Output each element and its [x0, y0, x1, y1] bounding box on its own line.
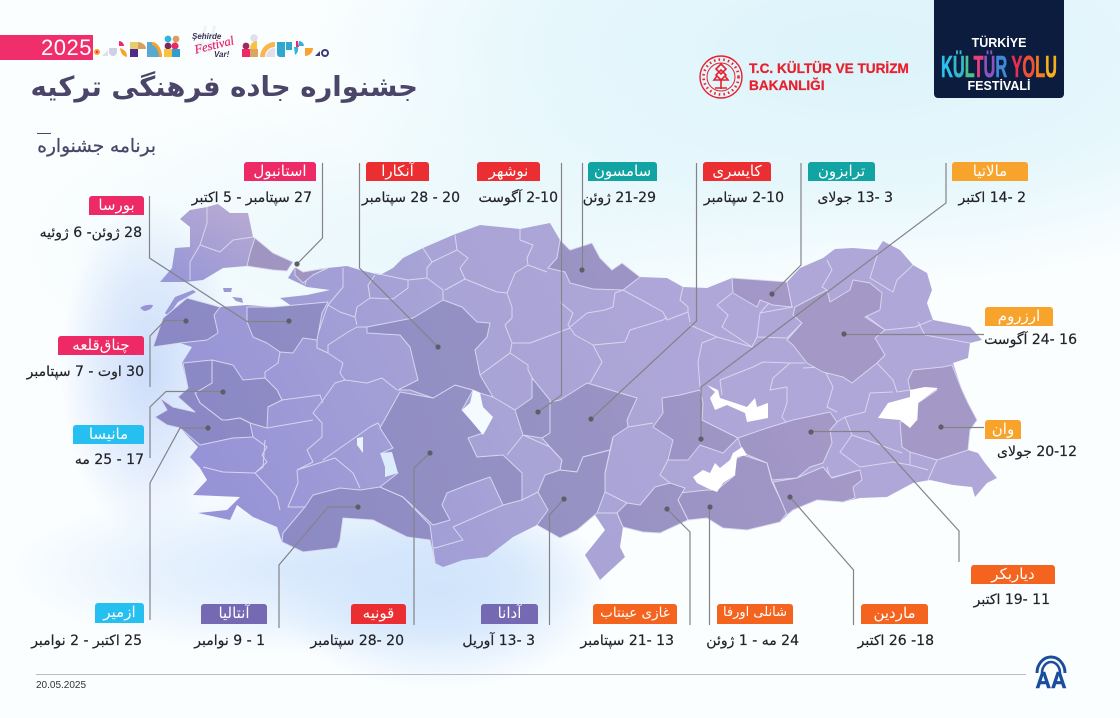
slogan: Şehirde Festival Var: # — [196, 18, 218, 62]
label: Gaziantep: غازی عینتاب — [600, 605, 670, 621]
leader: Canakkale — [150, 318, 189, 387]
label: Mardin: ماردین — [873, 604, 916, 622]
leader: Malatya — [698, 163, 946, 442]
label: Van — [985, 420, 1077, 460]
label: Istanbul: استانبول — [253, 162, 307, 180]
label: Erzurum: 16 -24 آگوست — [984, 332, 1077, 348]
label: Bursa: 28 ژوئن- 6 ژوئیه — [40, 225, 142, 241]
province: Mardin — [773, 467, 862, 515]
label: Mardin — [856, 604, 934, 649]
lake: Keban — [707, 385, 768, 422]
Kültür Yolu multicolour wordmark: KÜLTÜR YOLU — [941, 49, 1057, 84]
label: Erzurum — [984, 307, 1077, 348]
leader: Erzurum — [841, 331, 984, 337]
label: Canakkale: 30 اوت - 7 سپتامبر — [27, 364, 144, 380]
province borders — [190, 207, 970, 548]
label: Istanbul — [191, 162, 316, 206]
label: Antalya: 1 - 9 نوامبر — [194, 633, 265, 649]
label: Adana — [462, 604, 538, 649]
label: Kayseri — [703, 162, 784, 206]
label: Istanbul: 27 سپتامبر - 5 اکتبر — [192, 190, 312, 206]
ministry emblem — [699, 55, 743, 99]
leader: Istanbul — [294, 163, 322, 267]
province: Adana — [537, 450, 610, 538]
year banner — [0, 35, 93, 60]
leader: Bursa — [150, 196, 292, 324]
leader: Samsun — [579, 163, 585, 273]
label: Mardin: 18- 26 اکتبر — [858, 633, 934, 649]
footer rule — [36, 674, 1026, 675]
slogan: Şehirde Festival Var: Şehirde — [192, 32, 221, 41]
festival logo panel — [934, 0, 1064, 98]
leader: Van — [938, 424, 984, 430]
label: Izmir — [30, 603, 144, 649]
province: Nevsehir — [515, 378, 550, 438]
leader: Gaziantep — [664, 506, 690, 625]
province: Malatya — [653, 390, 738, 460]
label: Malatya: مالاتیا — [973, 162, 1007, 180]
province: Manisa — [195, 360, 282, 428]
leader: Antalya — [279, 504, 361, 628]
leader: Mardin — [787, 494, 854, 625]
Türkiye text: TÜRKİYE — [972, 36, 1026, 50]
label: Sanliurfa: شانلی اورفا — [723, 605, 787, 620]
label: Samsun: 21-29 ژوئن — [583, 190, 656, 206]
label: Kayseri: کایسری — [712, 162, 762, 180]
province: Izmir — [155, 360, 253, 445]
leader: Konya — [414, 450, 433, 625]
label: Ankara: آنکارا — [381, 162, 414, 180]
label: Sanliurfa: 24 مه - 1 ژوئن — [706, 633, 799, 649]
Festivali text: FESTİVALİ — [968, 79, 1030, 93]
province: Konya — [380, 385, 522, 525]
label: Malatya — [952, 162, 1028, 206]
label: Bursa — [40, 196, 144, 241]
province: Van — [900, 365, 977, 460]
leader: Trabzon — [769, 163, 801, 297]
label: Konya — [310, 604, 406, 649]
Thrace — [160, 204, 293, 282]
lake: Tuz — [462, 390, 493, 435]
slogan: Şehirde Festival Var: Festival — [193, 33, 235, 57]
ministry name: BAKANLIĞI — [749, 78, 825, 93]
map of Turkey — [140, 204, 997, 580]
agency logo — [1036, 656, 1066, 690]
province: Ankara — [367, 300, 493, 398]
label: Manisa: مانیسا — [89, 425, 128, 443]
label: Erzurum: ارزروم — [998, 307, 1040, 325]
leader: Ankara — [360, 163, 441, 350]
slogan: Şehirde Festival Var: Var! — [214, 50, 229, 59]
label: Van: 20-12 جولای — [997, 444, 1077, 460]
label: Diyarbakir: 11 -19 اکتبر — [974, 592, 1050, 608]
label: Ankara — [361, 162, 460, 206]
ministry name — [749, 60, 909, 93]
leader lines and city markers — [150, 163, 984, 628]
lake: Ataturk — [693, 447, 747, 492]
label: Kayseri: 2-10 سپتامبر — [704, 190, 784, 206]
lake: Beysehir — [380, 452, 398, 477]
ministry name: T.C. KÜLTÜR VE TURİZM — [749, 61, 909, 76]
leader: Manisa — [150, 389, 226, 458]
lake: Egirdir — [357, 437, 363, 453]
label: Gaziantep: 13 -21 سپتامبر — [580, 633, 674, 649]
label: Antalya — [194, 604, 267, 649]
label: Diyarbakir — [971, 565, 1055, 608]
province: Trabzon — [732, 278, 792, 307]
label: Konya: 20 -28 سپتامبر — [310, 633, 404, 649]
province: Diyarbakir — [738, 412, 837, 480]
subtitle with rule: برنامه جشنواره — [37, 136, 156, 157]
label: Izmir: ازمیر — [103, 603, 136, 621]
slogan: Şehirde Festival Var — [192, 18, 235, 62]
province: Antalya — [282, 487, 435, 563]
label: Diyarbakir: دیاربکر — [991, 565, 1035, 583]
label: Ankara: 20 - 28 سپتامبر — [362, 190, 460, 206]
label: Manisa — [73, 425, 144, 468]
label: Gaziantep — [580, 604, 677, 649]
leader: Izmir — [150, 425, 211, 620]
label: Van: وان — [992, 420, 1014, 438]
province: Samsun — [548, 240, 640, 290]
province: Gaziantep — [617, 483, 688, 533]
province: Istanbul — [247, 238, 327, 283]
label: Malatya: 2 -14 اکتبر — [959, 190, 1026, 206]
label: Izmir: 25 اکتبر - 2 نوامبر — [31, 633, 142, 649]
islands — [140, 288, 243, 316]
leader: Kayseri — [588, 163, 696, 422]
label: Adana: 3 -13 آوریل — [462, 633, 535, 649]
label: Nevsehir: 2-10 آگوست — [478, 190, 558, 206]
province: Erzurum — [787, 280, 885, 383]
label: Sanliurfa — [706, 604, 799, 649]
label: Trabzon — [808, 162, 893, 206]
Anatolia — [153, 223, 997, 580]
lake: Van — [878, 387, 938, 428]
label: Konya: قونیه — [363, 604, 394, 622]
label: Manisa: 17 - 25 مه — [75, 452, 144, 468]
ministry logo — [699, 55, 909, 99]
province: Bursa — [247, 302, 328, 353]
province: Kayseri — [542, 383, 637, 472]
label: Canakkale — [26, 336, 144, 380]
leader: Adana — [550, 496, 567, 625]
label: Canakkale: چناق‌قلعه — [72, 336, 130, 354]
festival decoration strip — [94, 34, 329, 57]
label: Trabzon: ترابزون — [818, 162, 865, 180]
leader: Sanliurfa — [707, 504, 713, 625]
label: Nevsehir: نوشهر — [489, 162, 528, 180]
leader: Nevsehir — [535, 163, 562, 415]
label: Samsun: سامسون — [594, 162, 651, 180]
date: 20.05.2025 — [36, 680, 86, 691]
label: Trabzon: 3 -13 جولای — [817, 190, 893, 206]
label: Adana: آدانا — [498, 604, 521, 622]
title: جشنواره جاده فرهنگی ترکیه — [30, 71, 418, 103]
leader: Diyarbakir — [808, 429, 959, 562]
province: Sanliurfa — [678, 455, 787, 530]
label: Antalya: آنتالیا — [218, 604, 250, 622]
label: Samsun — [583, 162, 657, 206]
year banner: 2025 — [41, 35, 92, 60]
province: Canakkale — [153, 298, 220, 347]
label: Bursa: بورسا — [98, 196, 135, 214]
label: Nevsehir — [477, 162, 558, 206]
